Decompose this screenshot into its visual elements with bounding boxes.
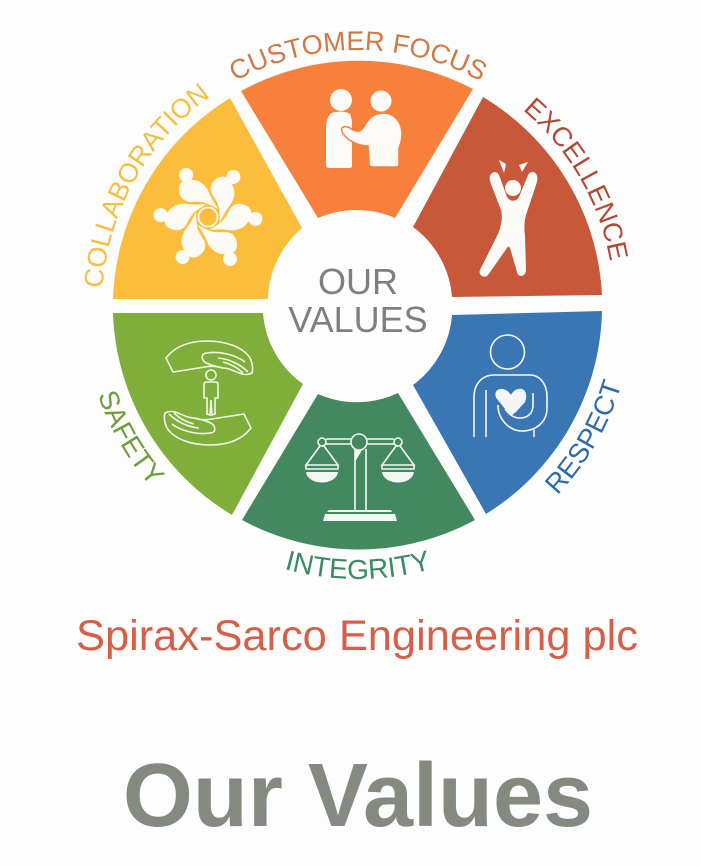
- label: safety: SAFETY: [100, 392, 166, 481]
- centre heading: OUR: [318, 261, 398, 302]
- panel: collaboration: [113, 98, 302, 299]
- icon: circle of people: [151, 167, 265, 267]
- icon: cheering person: [480, 160, 537, 277]
- title: Our Values: [123, 746, 593, 846]
- company name: Spirax-Sarco Engineering plc: [76, 612, 638, 660]
- values wheel: [113, 61, 602, 549]
- label: excellence: EXCELLENCE: [524, 97, 628, 260]
- icon: person with heart: [474, 335, 547, 437]
- panel: respect: [413, 311, 602, 514]
- panel: safety: [113, 313, 303, 515]
- label: integrity: INTEGRITY: [286, 550, 427, 580]
- icon: hands protecting person: [164, 341, 253, 445]
- label: collaboration: COLLABORATION: [84, 83, 209, 286]
- label: respect: RESPECT: [544, 378, 620, 494]
- icon: two people: [326, 89, 402, 168]
- centre heading: VALUES: [288, 299, 428, 340]
- panel: integrity: [242, 393, 475, 549]
- label: customer focus: CUSTOMER FOCUS: [230, 31, 486, 79]
- icon: balance scales: [306, 434, 414, 521]
- panel: excellence: [413, 97, 602, 297]
- centre heading: [288, 261, 428, 340]
- panel: customer focus: [241, 61, 473, 218]
